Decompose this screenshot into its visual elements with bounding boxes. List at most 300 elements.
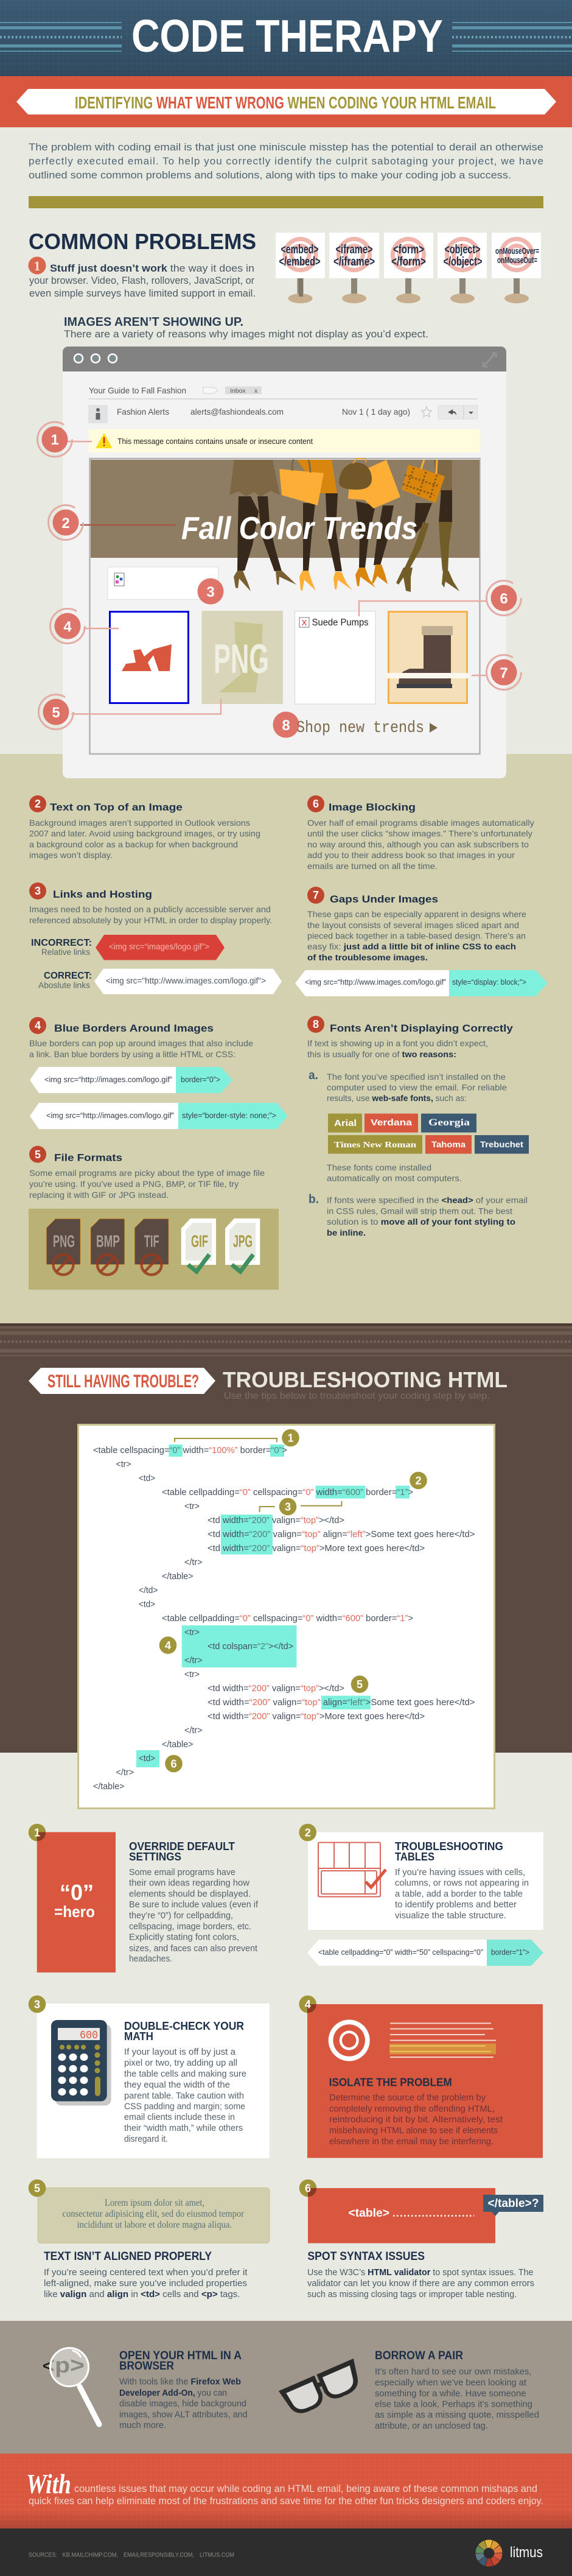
code arrow: border 0: <img src=“http://images.com/logo.gif” — [44, 1075, 172, 1084]
card 2: troubleshooting tables: columns, or rows not appearing in — [395, 1879, 529, 1888]
card 2: troubleshooting tables: TABLES — [395, 1851, 434, 1863]
tip 5: file formats: Some email programs are picky about the type of image file — [29, 1168, 265, 1178]
tip 5: file formats: 5 — [35, 1149, 41, 1161]
callout 6: 6 — [500, 591, 508, 607]
tip: open in browser: BROWSER — [119, 2360, 174, 2373]
callout 6 — [359, 581, 521, 616]
code listing: <table cellpadding=“0” cellspacing=“0” width=“600” border=“1”> — [162, 1613, 413, 1624]
tip: open in browser: Developer Add-On, you can — [119, 2388, 227, 2398]
tip: open in browser: disable images, hide background — [119, 2398, 246, 2409]
tip 6: image blocking: Image Blocking — [329, 801, 416, 813]
tip 6: image blocking: add you to their address book so that images in your — [307, 850, 515, 860]
card 5: text alignment: left-aligned, make sure you’ve included properties — [44, 2278, 247, 2289]
code arrow: border 1 — [307, 1940, 543, 1966]
font chips — [328, 1114, 529, 1153]
tip: open in browser: much more. — [119, 2420, 166, 2430]
callout 1 — [38, 422, 92, 457]
marker 3: 3 — [285, 1501, 291, 1513]
tip 7: gaps under images: These gaps can be especially apparent in designs where — [307, 909, 526, 919]
tip 3: links and hosting: Links and Hosting — [53, 889, 152, 900]
file format panel — [29, 1209, 279, 1290]
icon: target — [329, 2019, 370, 2061]
troubleshooting heading: Use the tips below to troubleshoot your coding step by step. — [224, 1391, 490, 1401]
tip 6: image blocking — [307, 795, 534, 871]
tip: borrow a pair: else take a look. Perhaps it’s something — [375, 2399, 532, 2409]
reason b: solution is to move all of your font styling to — [327, 1217, 515, 1226]
code listing: </tr> — [184, 1557, 203, 1568]
correct example: CORRECT: — [44, 971, 92, 981]
card 5: text alignment: TEXT ISN’T ALIGNED PROPERLY — [44, 2250, 212, 2263]
tip: borrow a pair: BORROW A PAIR — [375, 2349, 463, 2362]
card 3: double-check math: disregard it. — [124, 2134, 168, 2144]
tip: borrow a pair: especially when we’ve been looking at — [375, 2377, 527, 2388]
sign: object — [438, 233, 487, 303]
email window — [38, 347, 521, 778]
callout 4: 4 — [63, 619, 72, 635]
reason a: a. — [309, 1069, 318, 1082]
tip 6: image blocking: Over half of email programs disable images automatically — [307, 818, 534, 828]
tan section background — [0, 754, 572, 1323]
intro paragraph: perfectly executed email. To help you correctly identify the culprit sabotaging your project, we have — [29, 155, 543, 167]
incorrect example: Relative links — [41, 947, 90, 957]
code listing: <tr> — [184, 1627, 200, 1638]
card 2: troubleshooting tables: to identify problems and better — [395, 1900, 517, 1910]
reason b: b. — [309, 1192, 319, 1206]
sender details: Fashion Alerts — [117, 407, 169, 417]
tip 4: blue borders — [29, 1017, 288, 1129]
card 5: text alignment: If you’re seeing centered text when you’d prefer it — [44, 2267, 248, 2278]
callout 8: 8 — [282, 717, 290, 734]
footer — [0, 2528, 572, 2576]
code listing: </tr> — [184, 1655, 203, 1666]
tip 6: image blocking: no way around this, although you can ask subscribers to — [307, 839, 529, 849]
callout 1: 1 — [51, 432, 59, 448]
marker 1: 1 — [287, 1432, 294, 1445]
file: jpg: JPG — [233, 1231, 253, 1251]
card 6: syntax issues: such as missing closing tags or improper table nesting. — [307, 2289, 517, 2300]
card 3: double-check math: If your layout is off by just a — [124, 2047, 236, 2057]
fashion banner — [91, 459, 480, 592]
sample paragraph: Lorem ipsum dolor sit amet, — [105, 2198, 204, 2208]
brackets — [175, 1438, 342, 1512]
warning bar — [89, 429, 480, 452]
heading: images not showing: IMAGES AREN’T SHOWING UP. — [64, 315, 243, 329]
card 3: double-check math: email clients include these in — [124, 2113, 235, 2122]
marker 4 — [159, 1636, 176, 1654]
tip: borrow a pair: as simple as a missing quote, misspelled — [375, 2410, 539, 2420]
card 5: text alignment: like valign and align in <td> cells and <p> tags. — [44, 2289, 240, 2300]
product: png: PNG — [214, 636, 269, 682]
tip: open in browser: With tools like the Firefox Web — [119, 2376, 241, 2387]
sign: iframe: <iframe> — [336, 243, 372, 256]
card 4: isolate the problem: ISOLATE THE PROBLEM — [329, 2077, 452, 2089]
sign: onmouseover: onMouseOut= — [497, 255, 537, 266]
tip 7: gaps under images — [295, 887, 548, 996]
card 3: double-check math — [29, 1996, 270, 2158]
marker 1 — [282, 1429, 299, 1446]
card 4: isolate the problem: reintroducing it bit by bit. Alternatively, test — [329, 2115, 503, 2125]
tip 5: file formats: File Formats — [54, 1152, 122, 1163]
conclusion band: countless issues that may occur while coding an HTML email, being aware of these common mishaps and — [74, 2483, 537, 2494]
sources: KB.MAILCHIMP.COM, — [62, 2552, 118, 2559]
marker 6 — [165, 1755, 183, 1772]
heading: images not showing: There are a variety of reasons why images might not display as you’d expect. — [64, 328, 428, 340]
card 4: isolate the problem: Determine the source of the problem by — [329, 2093, 486, 2103]
sign: onmouseover — [492, 233, 541, 303]
problem 1 text: even simple surveys have limited support in email. — [29, 287, 256, 299]
tip 5: file formats — [29, 1146, 279, 1290]
troubleshooting heading: TROUBLESHOOTING HTML — [223, 1367, 507, 1392]
header band — [0, 0, 572, 76]
reason b: be inline. — [327, 1228, 366, 1237]
banner headline: Fall Color Trends — [181, 511, 417, 546]
shop link: Shop new trends — [296, 719, 424, 737]
tip 7: gaps under images: the layout consists of several images sliced apart and — [307, 920, 519, 930]
code arrow: border-style none: style=“border-style: none;”> — [182, 1111, 276, 1120]
card 2: troubleshooting tables: TROUBLESHOOTING — [395, 1840, 503, 1853]
code arrow: display block: <img src=“http://www.images.com/logo.gif” — [305, 977, 446, 987]
card 6: syntax issues: SPOT SYNTAX ISSUES — [307, 2250, 425, 2263]
icon: calculator: 600 — [80, 2030, 98, 2042]
code listing: </tr> — [184, 1725, 203, 1736]
code arrow: border 1: border=“1”> — [491, 1948, 529, 1957]
sources: SOURCES: — [29, 2552, 57, 2559]
card 1: override default settings: SETTINGS — [129, 1851, 181, 1863]
tip 3: links and hosting: referenced absolutely by your HTML in order to display properly. — [29, 915, 272, 925]
card 5: text alignment: 5 — [34, 2183, 40, 2195]
reason a: computer used to view the email. For reliable — [327, 1083, 507, 1093]
product: blocked image: X — [302, 618, 307, 627]
card 6: syntax issues: <table> — [348, 2207, 389, 2220]
tip: open in browser — [40, 2348, 247, 2430]
tip 2: text on top of image: Text on Top of an Image — [50, 801, 183, 813]
tip 4: blue borders: Blue Borders Around Images — [54, 1022, 214, 1034]
icon: magnifier: < — [43, 2358, 51, 2374]
sources: LITMUS.COM — [200, 2552, 234, 2559]
intro paragraph: The problem with coding email is that just one miniscule misstep has the potential to derail an otherwise — [29, 141, 543, 153]
code listing: <td> — [139, 1473, 155, 1483]
tip 6: image blocking: emails are turned on all the time. — [307, 861, 438, 871]
marker 5 — [351, 1675, 368, 1693]
troubleshooting section background — [0, 1323, 572, 1753]
card 4: isolate the problem: completely removing the offending HTML, — [329, 2105, 495, 2114]
font chips: Verdana — [371, 1117, 413, 1128]
tip 3: links and hosting — [29, 882, 282, 994]
card 1: override default settings: they’re “0”) for cellpadding, — [129, 1911, 233, 1921]
marker 3 — [279, 1498, 296, 1515]
reason a: automatically on most computers. — [327, 1173, 462, 1183]
code listing: <td width=“200” valign=“top” align=“left”>Some text goes here</td> — [208, 1529, 475, 1540]
subtitle band — [0, 76, 572, 127]
product: boot with gap — [386, 611, 469, 703]
incorrect example: <img src=“images/logo.gif”> — [109, 941, 209, 951]
divider bar — [29, 196, 543, 208]
email window: Inbox — [230, 387, 246, 395]
product: png — [202, 611, 283, 704]
card 1: override default settings — [29, 1824, 259, 1972]
icon: glasses — [279, 2359, 366, 2419]
tip 7: gaps under images: 7 — [313, 889, 319, 901]
icon: magnifier: <p> — [40, 2353, 85, 2377]
tip: borrow a pair: something for a while. Have someone — [375, 2388, 526, 2399]
code arrow: border 1: <table cellpadding=“0” width=“50” cellspacing=“0” — [318, 1948, 483, 1957]
code arrow: border 0 — [30, 1067, 232, 1093]
file: tif: TIF — [144, 1231, 159, 1251]
subtitle: IDENTIFYING WHAT WENT WRONG WHEN CODING YOUR HTML EMAIL — [75, 93, 496, 112]
intro paragraph — [29, 141, 543, 181]
sign: onmouseover: onMouseOver= — [495, 246, 539, 256]
tip 2: text on top of image — [29, 795, 260, 860]
file: tif — [134, 1219, 169, 1275]
sign: form: </form> — [391, 255, 426, 269]
reason b: in CSS rules, Gmail will strip them out. The best — [327, 1206, 512, 1216]
code arrow: border-style none — [30, 1103, 288, 1129]
code arrow: border-style none: <img src=“http://images.com/logo.gif” — [46, 1111, 174, 1120]
banner: still having trouble — [29, 1368, 215, 1394]
card 3: double-check math: they equal the width of the — [124, 2080, 230, 2090]
tip 5: file formats: you’re using. If you’ve used a PNG, BMP, or TIF file, try — [29, 1179, 239, 1189]
taupe band — [0, 2321, 572, 2454]
reason a: These fonts come installed — [327, 1163, 431, 1172]
tip 7: gaps under images: of the troublesome images. — [307, 952, 428, 962]
file: gif — [181, 1219, 216, 1272]
card 1: override default settings: =hero — [54, 1902, 95, 1921]
sender avatar — [88, 405, 108, 423]
heading: common problems: COMMON PROBLEMS — [29, 229, 256, 254]
card 3: double-check math: the table cells and making sure — [124, 2069, 246, 2079]
card 3: double-check math: pixel or two, try adding up all — [124, 2058, 237, 2068]
conclusion band — [0, 2454, 572, 2528]
problem 1 text: your browser. Video, Flash, rollovers, JavaScript, or — [29, 275, 254, 286]
code listing: <td> — [139, 1599, 155, 1610]
card 6: syntax issues: 6 — [305, 2183, 311, 2195]
code listing: <table cellpadding=“0” cellspacing=“0” width=“600” border=“1”> — [162, 1487, 413, 1497]
card 1: override default settings: “0” — [60, 1880, 94, 1905]
tip 7: gaps under images: easy fix: just add a little bit of inline CSS to each — [307, 941, 516, 951]
card 1: override default settings: Be sure to include values (even if — [129, 1900, 259, 1910]
product: blue border — [110, 611, 189, 703]
icon: table with check — [318, 1843, 386, 1896]
email subject: Your Guide to Fall Fashion — [89, 385, 186, 395]
shoes — [234, 565, 459, 592]
card 6: syntax issues: validator can let you know if there are any common errors — [307, 2278, 534, 2289]
card 1: override default settings: sizes, and faces can also prevent — [129, 1944, 257, 1954]
sources: EMAILRESPONSIBLY.COM, — [124, 2552, 194, 2559]
tip 8: fonts: 8 — [313, 1018, 319, 1030]
heading: images not showing — [64, 315, 428, 340]
code listing: <td colspan=“2”></td> — [208, 1641, 293, 1652]
tooltip — [483, 2195, 543, 2216]
code listing: <td width=“200” valign=“top”></td> — [208, 1683, 344, 1694]
code listing — [93, 1445, 475, 1792]
troubleshooting heading — [29, 1367, 507, 1401]
reason a: The font you’ve specified isn’t installed on the — [327, 1072, 506, 1082]
code arrow: display block — [295, 970, 548, 996]
tip 2: text on top of image: 2007 and later. Avoid using background images, or try using — [29, 829, 260, 839]
tooltip: </table>? — [488, 2197, 539, 2210]
sign: embed: <embed> — [281, 243, 319, 256]
card 3: double-check math: CSS padding and margin; some — [124, 2102, 245, 2112]
card 2: troubleshooting tables: 2 — [305, 1827, 311, 1839]
code listing: <td width=“200” valign=“top” align=“left”>Some text goes here</td> — [208, 1697, 475, 1708]
sender details — [117, 407, 410, 417]
correct example — [38, 969, 282, 994]
code listing: <td> — [139, 1753, 155, 1764]
code listing: <td width=“200” valign=“top”>More text goes here</td> — [208, 1543, 425, 1554]
tip 3: links and hosting: 3 — [35, 885, 41, 897]
sign: object: </object> — [443, 255, 482, 269]
card 2: troubleshooting tables: If you’re having issues with cells, — [395, 1868, 525, 1877]
tip 2: text on top of image: images won’t display. — [29, 850, 113, 860]
font chips: Trebuchet — [480, 1139, 523, 1149]
marker 6: 6 — [170, 1758, 177, 1770]
tip: borrow a pair: It’s often hard to see our own mistakes, — [375, 2367, 532, 2377]
card 5: text alignment — [29, 2180, 270, 2300]
card 3: double-check math: DOUBLE-CHECK YOUR — [124, 2020, 244, 2032]
tip 8: fonts: this is usually for one of two reasons: — [307, 1049, 456, 1059]
tip 8: fonts: If text is showing up in a font you didn’t expect, — [307, 1038, 488, 1048]
incorrect example: INCORRECT: — [31, 938, 92, 948]
code listing: <tr> — [184, 1669, 200, 1680]
tip 3: links and hosting: Images need to be hosted on a publicly accessible server and — [29, 904, 271, 914]
callout 3: 3 — [206, 584, 215, 600]
callout 5 — [39, 694, 221, 730]
sender details: Nov 1 ( 1 day ago) — [342, 407, 410, 417]
tip 4: blue borders: Blue borders can pop up around images that also include — [29, 1038, 253, 1048]
sign: iframe — [329, 233, 379, 303]
tip 7: gaps under images: pieced back together in a table-based design. There’s an — [307, 931, 526, 940]
tip 2: text on top of image: a background color as a backup for when background — [29, 839, 238, 849]
code listing: </td> — [139, 1585, 158, 1596]
sample paragraph: incididunt ut labore et dolore magna aliqua. — [77, 2220, 232, 2230]
callout 7: 7 — [500, 665, 508, 681]
code listing: </table> — [162, 1739, 194, 1750]
card 2: troubleshooting tables: visualize the table structure. — [395, 1911, 506, 1921]
tip 5: file formats: replacing it with GIF or JPG instead. — [29, 1190, 169, 1200]
tip: open in browser: OPEN YOUR HTML IN A — [119, 2349, 242, 2362]
card 2: troubleshooting tables: a table, add a border to the table — [395, 1889, 523, 1899]
sign: form — [384, 233, 433, 303]
code arrow: border 0: border=“0”> — [181, 1075, 220, 1084]
card 1: override default settings: elements should be displayed. — [129, 1889, 251, 1899]
file: png: PNG — [53, 1231, 75, 1251]
marker 5: 5 — [357, 1678, 363, 1691]
tip 8: fonts — [307, 1016, 529, 1237]
warning bar: This message contains contains unsafe or insecure content — [117, 437, 313, 446]
intro paragraph: outlined some common problems and solutions, along with tips to make your coding job a success. — [29, 169, 511, 181]
callout 8 — [273, 711, 299, 738]
card 1: override default settings: Explicitly stating font colors, — [129, 1933, 239, 1943]
tip 4: blue borders: a link. Ban blue borders by using a little HTML or CSS: — [29, 1049, 235, 1059]
callout 2: 2 — [61, 515, 70, 532]
tip 7: gaps under images: Gaps Under Images — [330, 893, 438, 905]
code listing: <tr> — [116, 1459, 131, 1469]
code arrow: display block: style=“display: block;”> — [452, 977, 526, 987]
marker 4: 4 — [165, 1639, 171, 1652]
card 1: override default settings: headaches. — [129, 1954, 172, 1964]
tip: open in browser: images, show ALT attributes, and — [119, 2409, 247, 2420]
card 3: double-check math: parent table. Take caution with — [124, 2091, 244, 2101]
sign: embed: </embed> — [279, 255, 320, 269]
card 2: troubleshooting tables — [299, 1824, 543, 1930]
sign: embed — [276, 233, 325, 303]
email frame — [90, 459, 480, 754]
code listing: </table> — [162, 1571, 194, 1582]
sign: iframe: </iframe> — [333, 255, 375, 269]
card 3: double-check math: their “width math,” while others — [124, 2124, 243, 2133]
tip 8: fonts: Fonts Aren’t Displaying Correctly — [330, 1022, 514, 1034]
card 1: override default settings: OVERRIDE DEFAULT — [129, 1840, 235, 1853]
tip 4: blue borders: 4 — [35, 1019, 41, 1032]
conclusion band: With — [26, 2468, 71, 2499]
reason a: results, use web-safe fonts, such as: — [327, 1093, 467, 1103]
font chips: Georgia — [428, 1117, 470, 1128]
card 1: override default settings: cellspacing, image borders, etc. — [129, 1922, 251, 1932]
icon: text lines — [389, 2023, 496, 2057]
callout 2 — [49, 505, 176, 540]
card 3: double-check math: 3 — [34, 1999, 40, 2011]
callout 4 — [50, 609, 119, 643]
reply button — [438, 406, 478, 419]
code panel — [78, 1425, 494, 1809]
icon: calculator — [51, 2020, 111, 2106]
product: blocked image: Suede Pumps — [312, 618, 369, 628]
font chips: Times New Roman — [334, 1141, 416, 1150]
font chips: Tahoma — [431, 1139, 466, 1149]
code listing: <table cellspacing=“0” width=“100%” border=“0”> — [93, 1445, 287, 1455]
signs illustration — [276, 233, 541, 303]
tip 2: text on top of image: Background images aren’t supported in Outlook versions — [29, 818, 250, 828]
sign: form: <form> — [393, 243, 424, 256]
correct example: <img src="http://www.images.com/logo.gif"> — [106, 976, 266, 985]
banner: still having trouble: STILL HAVING TROUBLE? — [47, 1371, 199, 1392]
icon: magnifier — [40, 2348, 99, 2424]
problem 1 text: 1 — [34, 258, 40, 273]
marker 2 — [410, 1472, 427, 1489]
email window: x — [254, 387, 258, 395]
card 4: isolate the problem: 4 — [305, 1999, 311, 2011]
sample paragraph — [62, 2198, 245, 2230]
title: CODE THERAPY — [131, 10, 443, 62]
tip 6: image blocking: until the user clicks “show images.” There’s unfortunately — [307, 829, 532, 839]
callout 5: 5 — [52, 705, 60, 721]
code listing: <td width=“200” valign=“top”>More text goes here</td> — [208, 1711, 425, 1722]
code listing: <td width=“200” valign=“top”></td> — [208, 1515, 344, 1526]
file: bmp — [91, 1219, 125, 1275]
card 1: override default settings: Some email programs have — [129, 1868, 235, 1877]
card 4: isolate the problem: misbehaving HTML alone to see if elements — [329, 2126, 498, 2136]
file: png — [46, 1219, 80, 1275]
code listing: </tr> — [116, 1767, 134, 1778]
callout 3 — [197, 579, 224, 604]
tip: borrow a pair — [279, 2349, 539, 2431]
reason b — [309, 1192, 528, 1237]
sources — [29, 2552, 234, 2559]
code listing: <tr> — [184, 1501, 200, 1511]
reason a — [309, 1069, 529, 1183]
tip 6: image blocking: 6 — [313, 798, 319, 810]
card 4: isolate the problem — [299, 1996, 543, 2158]
file: bmp: BMP — [96, 1231, 120, 1251]
product: blocked image — [295, 611, 375, 704]
litmus logo — [476, 2540, 543, 2566]
card 1: override default settings: their own ideas regarding how — [129, 1879, 250, 1888]
card 3: double-check math: MATH — [124, 2030, 153, 2043]
problem 1 text: Stuff just doesn’t work the way it does in — [50, 262, 254, 274]
code listing: </table> — [93, 1781, 125, 1792]
correct example: Aboslute links — [38, 980, 90, 990]
file: jpg — [225, 1219, 260, 1272]
